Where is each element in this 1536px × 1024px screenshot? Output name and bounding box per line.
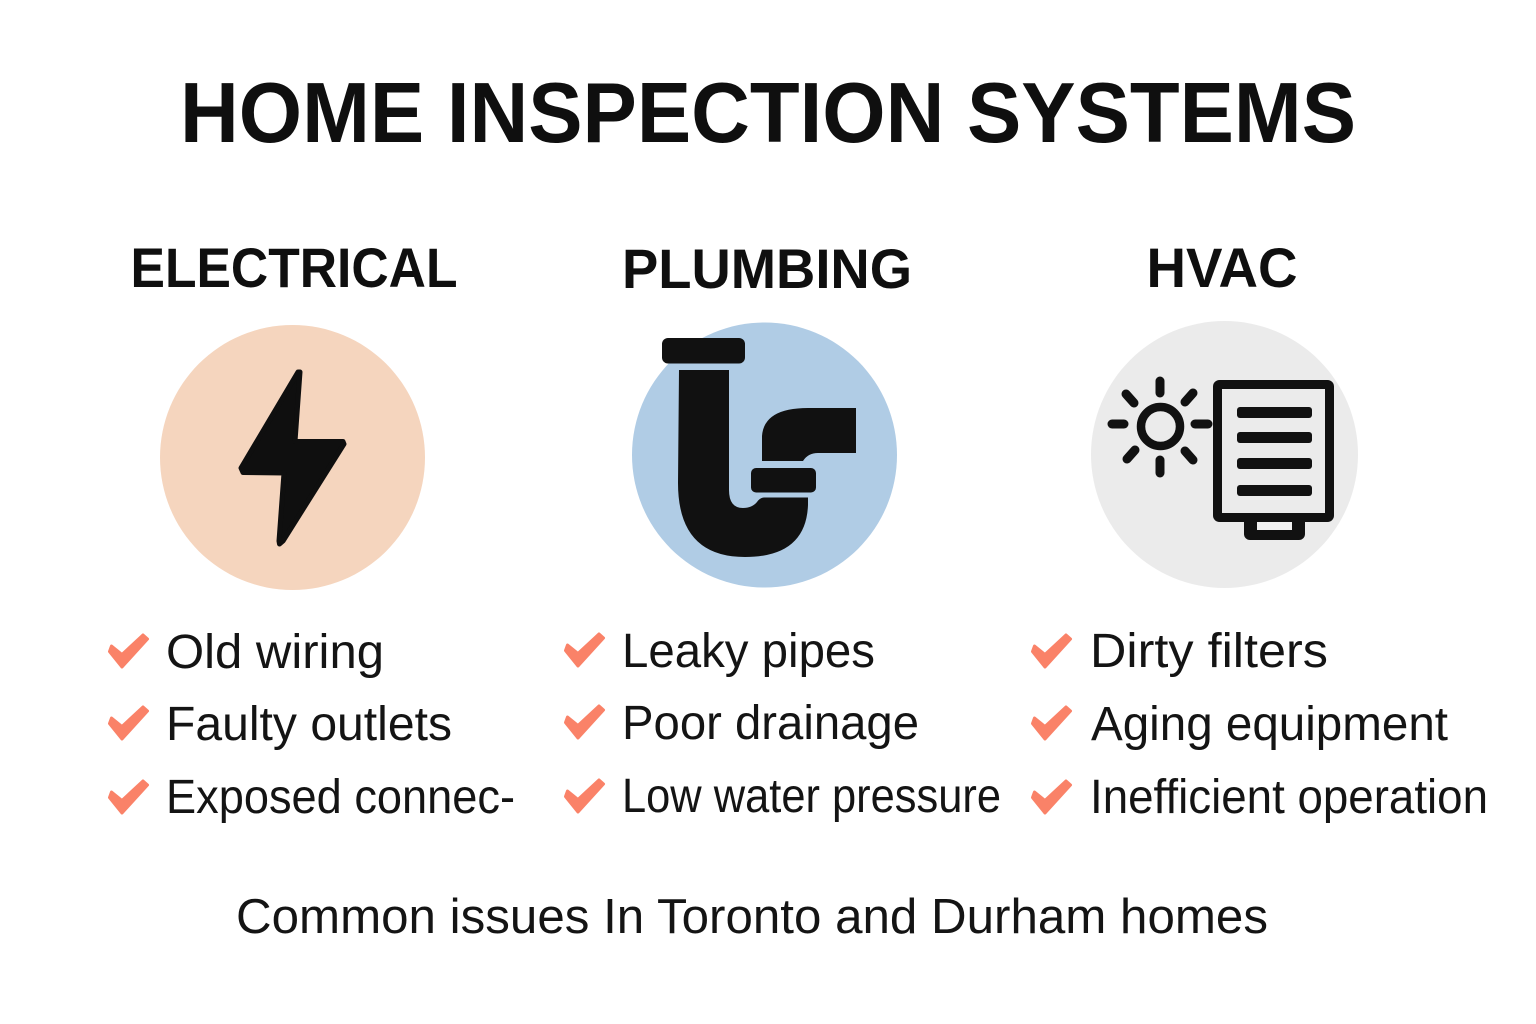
check list: hvac: Dirty filters [1090, 625, 1328, 678]
check list: plumbing: Leaky pipes [622, 625, 875, 678]
heading: electrical: ELECTRICAL [130, 236, 458, 299]
check list: electrical: Exposed connec- [166, 771, 515, 824]
check list: plumbing [566, 625, 1001, 823]
check list: electrical: Old wiring [166, 626, 384, 679]
title: HOME INSPECTION SYSTEMS [180, 66, 1356, 161]
check list: electrical [110, 626, 515, 824]
footer caption: Common issues In Toronto and Durham homes [236, 890, 1268, 944]
check list: hvac: Inefficient operation [1090, 771, 1488, 824]
check list: electrical: Faulty outlets [166, 698, 452, 751]
heading: plumbing: PLUMBING [622, 237, 912, 300]
check list: plumbing: Poor drainage [622, 697, 919, 750]
heading: hvac: HVAC [1146, 236, 1298, 299]
icon: lightning bolt [160, 325, 425, 590]
icon: hvac unit and sun [1091, 321, 1358, 588]
check list: hvac: Aging equipment [1091, 698, 1448, 751]
icon: plumbing pipe [632, 322, 897, 588]
check list: hvac [1032, 625, 1488, 824]
check list: plumbing: Low water pressure [622, 770, 1001, 823]
